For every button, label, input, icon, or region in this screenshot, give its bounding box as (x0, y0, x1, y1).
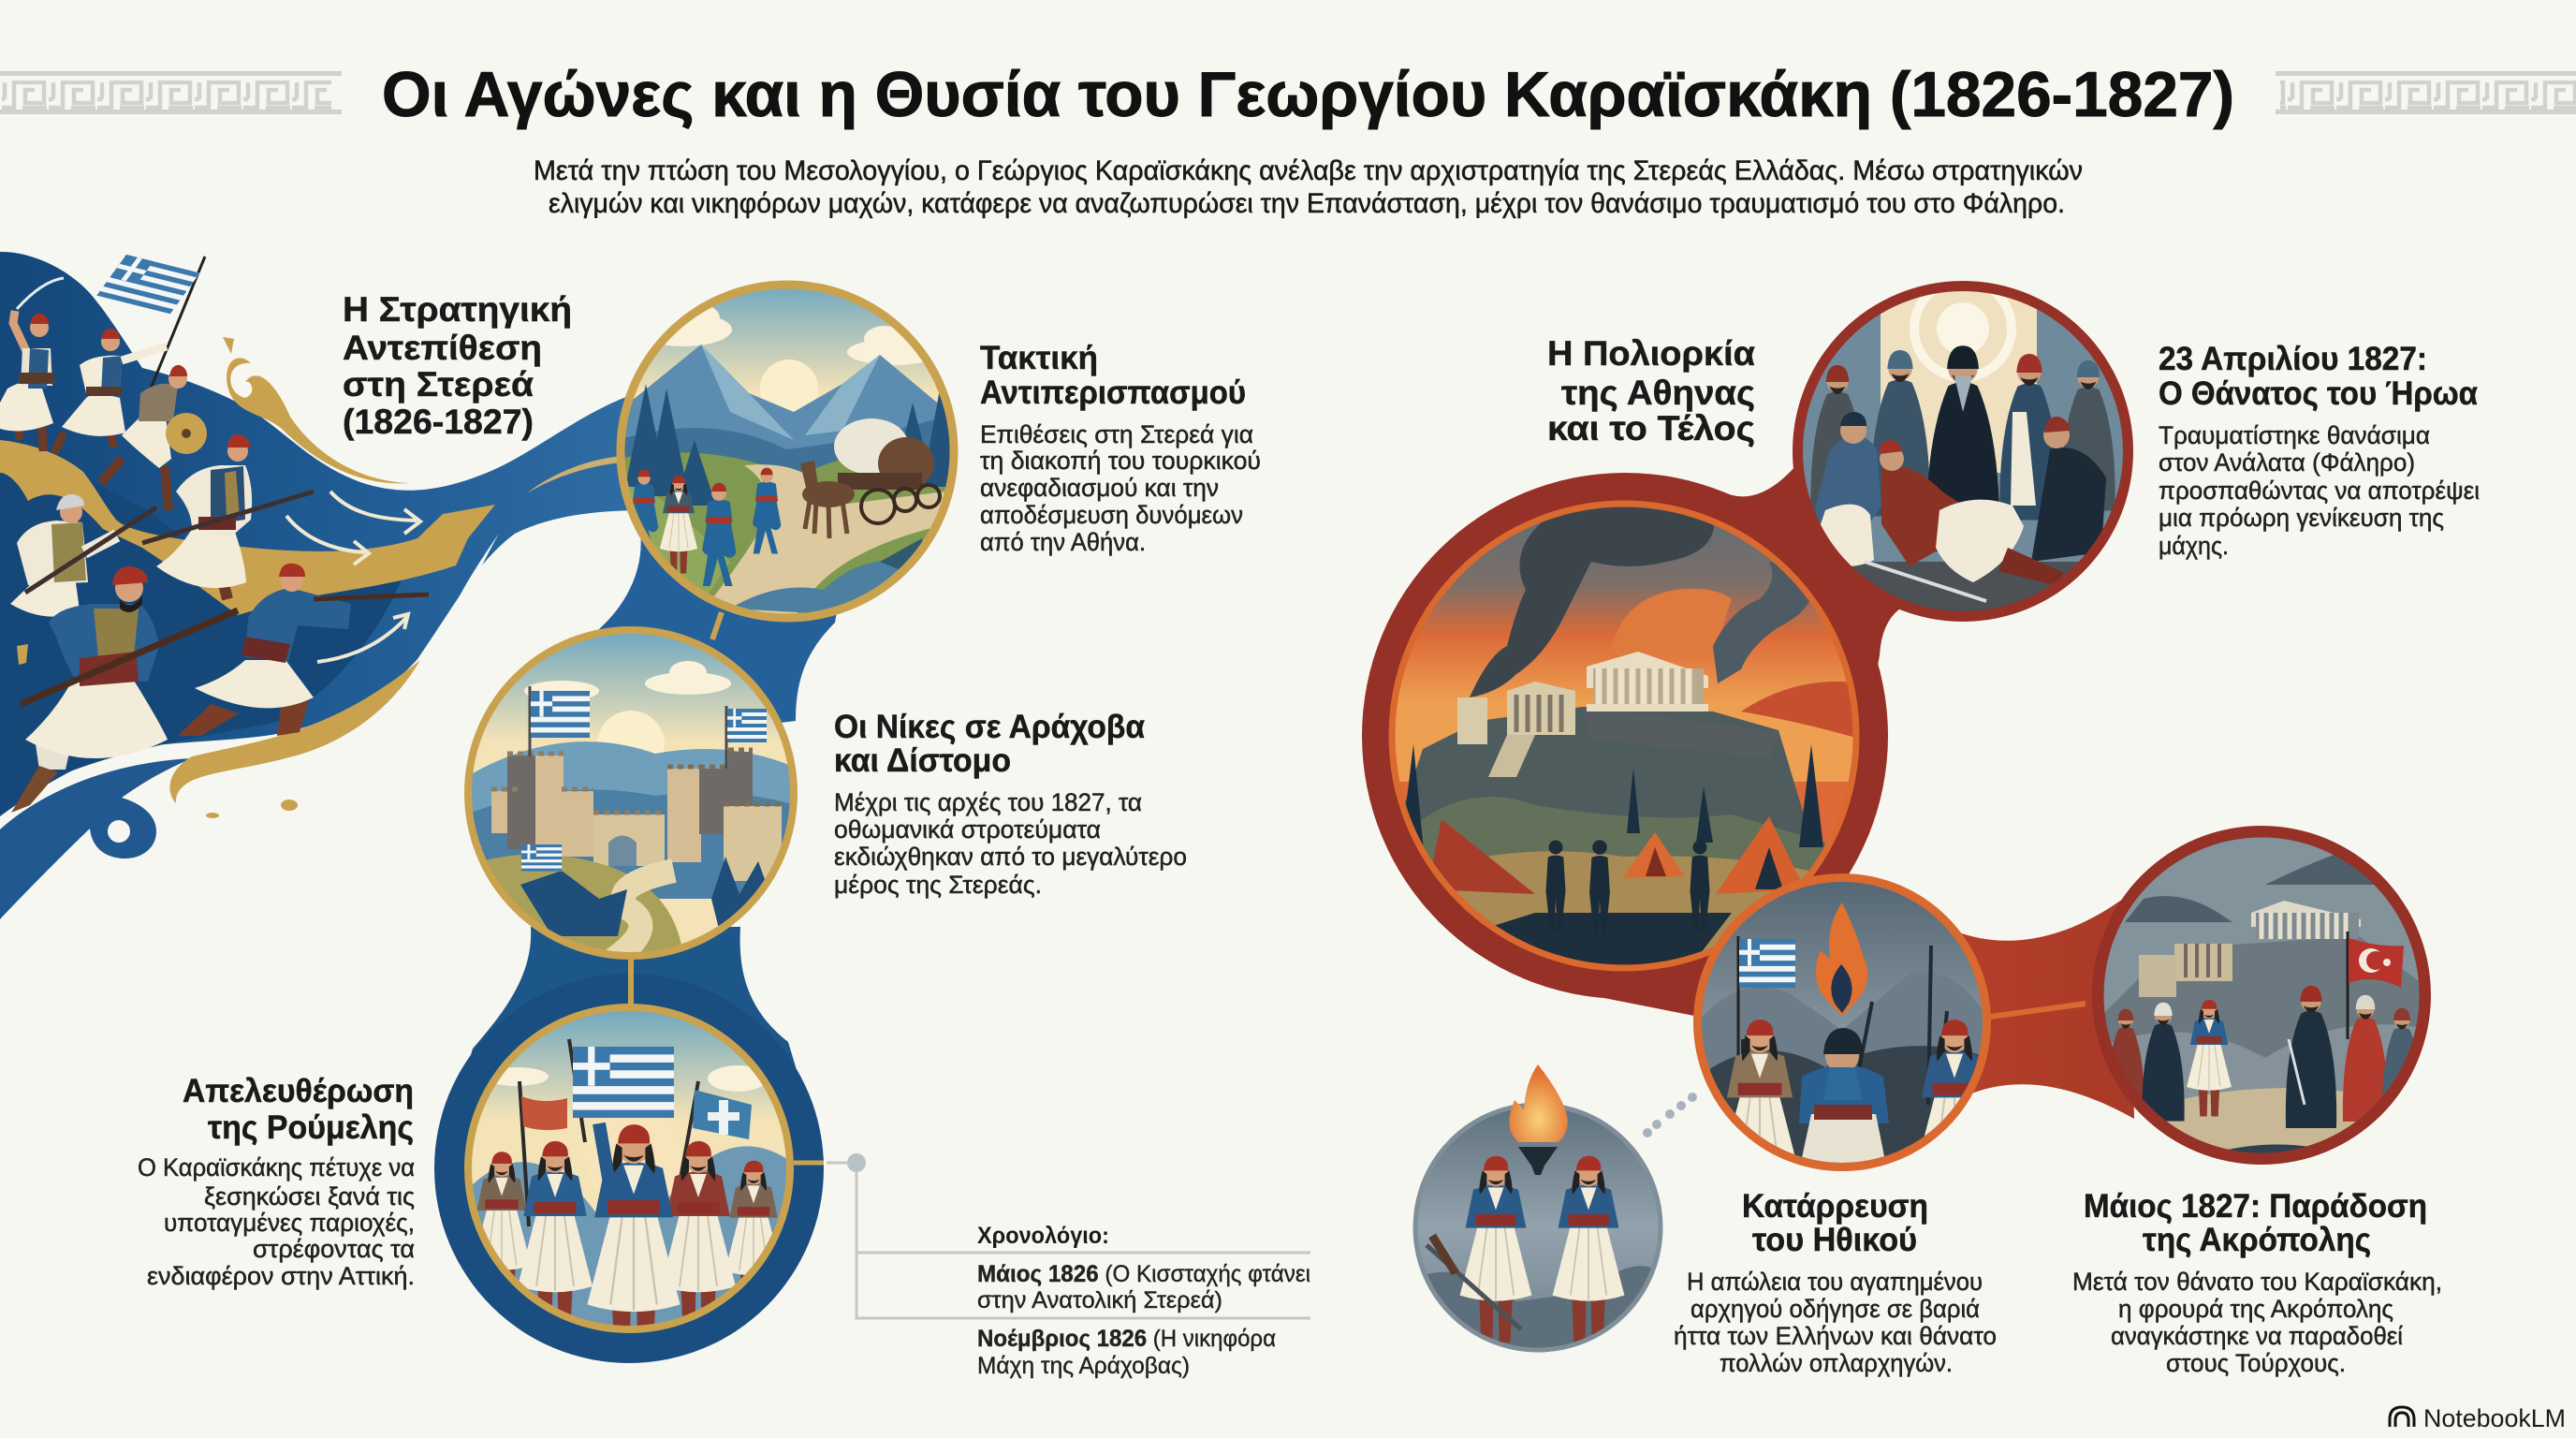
text: 23 April 1827: στον Ανάλατα (Φάληρο) (2159, 448, 2415, 477)
heading: siege of Athens: Η Πολιορκία (1547, 334, 1755, 373)
marching soldiers (753, 468, 781, 554)
text: 23 April 1827: 23 Απριλίου 1827: (2159, 341, 2427, 377)
heading: siege of Athens: και το Τέλος (1547, 409, 1755, 448)
torch flame (1509, 1064, 1568, 1142)
text: diversion tactics: ανεφαδιασμού και την (980, 474, 1219, 502)
kneeling men (1814, 438, 1881, 524)
subtitle: ελιγμών και νικηφόρων μαχών, κατάφερε να αναζωπυρώσει την Επανάσταση, μέχρι τον θανάσιμο τραυματισμό του στο Φάληρο. (549, 188, 2065, 219)
fighter 3 with shield (101, 365, 207, 510)
negotiating figures (2107, 1009, 2144, 1112)
connector: neck between circle 2 and circle 3 (435, 927, 824, 1173)
trees (625, 384, 959, 506)
text: 23 April 1827: προσπαθώντας να αποτρέψει (2159, 477, 2480, 505)
timeline text: Μάιος 1826 (Ο Κισσταχής φτάνει (977, 1261, 1310, 1287)
medallion: diversion tactics (618, 281, 959, 618)
subtitle: Μετά την πτώση του Μεσολογγίου, ο Γεώργιος Καραϊσκάκης ανέλαβε την αρχιστρατηγία της Στερεάς Ελλάδας. Μέσω στρατηγικών (534, 155, 2083, 186)
text: liberation of Roumeli: Απελευθέρωση (183, 1073, 414, 1109)
left castle (491, 754, 665, 866)
text: diversion tactics: Αντιπερισπασμού (980, 374, 1246, 411)
text: liberation of Roumeli: της Ρούμελης (208, 1109, 414, 1146)
dotted trail to torch medallion (1643, 1093, 1697, 1137)
wagon (834, 418, 940, 523)
text: collapse of morale: Κατάρρευση (1742, 1188, 1928, 1225)
timeline text: Μάχη της Αράχοβας) (977, 1353, 1190, 1379)
text: May 1827 surrender: στους Τούρχους. (2166, 1349, 2346, 1377)
medallion: torch and fallen leaders (1404, 1064, 1676, 1357)
priest beard (1954, 376, 1972, 412)
title: Οι Αγώνες και η Θυσία του Γεωργίου Καραϊσκάκη (1826-1827) (382, 59, 2234, 130)
connector: ribbon to first two circles (562, 487, 842, 749)
figures (1546, 840, 1709, 913)
text: 23 April 1827 (2159, 341, 2480, 560)
timeline text: Χρονολόγιο: (977, 1223, 1109, 1249)
medallion: collapse of morale (1693, 873, 1994, 1222)
medallion: liberation of Roumeli (468, 1007, 790, 1365)
smoke (1470, 505, 1714, 697)
gold thin arc to circle (527, 456, 622, 493)
gold flecks (17, 337, 298, 818)
tents (1427, 816, 1805, 894)
fighter 6 with musket (11, 566, 238, 813)
fighter 2 (54, 329, 167, 453)
callout: timeline connector (794, 1153, 1310, 1318)
text: victories: Οι Νίκες σε Αράχοβα (834, 709, 1145, 745)
lower swoosh (0, 758, 192, 919)
text: May 1827 surrender: της Ακρόπολης (2143, 1222, 2371, 1258)
text: 23 April 1827: Τραυματίστηκε θανάσιμα (2159, 421, 2430, 449)
text: 23 April 1827: Ο Θάνατος του Ήρωα (2159, 375, 2478, 412)
heading: strategic counterattack: Αντεπίθεση (343, 329, 542, 367)
heading: strategic counterattack: στη Στερεά (343, 365, 534, 404)
mourning soldiers (1720, 1020, 1799, 1222)
text: 23 April 1827: μάχης. (2159, 532, 2229, 560)
text: victories (834, 709, 1187, 899)
standing men (1810, 365, 1854, 511)
text: liberation of Roumeli: ενδιαφέρον στην Αττική. (147, 1262, 415, 1290)
Turkish flag (2348, 932, 2404, 1039)
text: diversion tactics: τη διακοπή του τουρκικού (980, 447, 1261, 475)
meander border right (2276, 71, 2576, 114)
heading: siege of Athens: της Αθηνας (1561, 374, 1755, 412)
text: diversion tactics: Επιθέσεις στη Στερεά για (980, 420, 1253, 448)
hill and road (487, 855, 681, 952)
text: victories: και Δίστομο (834, 742, 1011, 779)
flags (520, 1039, 698, 1226)
rocks (736, 561, 899, 612)
fighter 7 with musket (178, 564, 429, 736)
white arrows (286, 492, 420, 662)
right castle (667, 750, 782, 881)
text: diversion tactics (980, 340, 1261, 556)
spears (1743, 946, 1947, 1123)
timeline text (977, 1223, 1310, 1379)
gold connector line 2-3 (628, 955, 634, 1006)
panel: red network backing (1362, 281, 2431, 1165)
torch bowl (1518, 1147, 1558, 1175)
medallion: siege of Athens (1385, 501, 1863, 974)
flag (1737, 936, 1739, 1058)
Propylaea (1457, 682, 1575, 777)
subtitle (534, 155, 2083, 219)
text: diversion tactics: αποδέσμευση δυνόμεων (980, 501, 1243, 529)
text: victories: Μέχρι τις αρχές του 1827, τα (834, 788, 1142, 816)
flag on pole (96, 255, 205, 400)
heading: strategic counterattack (343, 290, 572, 441)
swoosh curl (108, 820, 130, 843)
glow clouds (1612, 588, 1732, 646)
text: diversion tactics: Τακτική (980, 340, 1098, 376)
acropolis rock (1405, 707, 1803, 835)
ground (1455, 851, 1808, 951)
road (714, 464, 944, 614)
text: collapse of morale: του Ηθικού (1752, 1222, 1917, 1258)
clouds (665, 307, 923, 365)
fighter 5 with musket (10, 494, 156, 617)
logo: NotebookLM: NotebookLM (2423, 1404, 2566, 1432)
propylaea (2139, 944, 2232, 997)
text: May 1827 surrender: Μετά τον θάνατο του Καραϊσκάκη, (2072, 1268, 2442, 1296)
text: liberation of Roumeli (138, 1073, 415, 1290)
dark wave (0, 449, 412, 805)
text: May 1827 surrender: Μάιος 1827: Παράδοση (2084, 1188, 2427, 1225)
sword (1865, 562, 1986, 601)
timeline text: στην Ανατολική Στερεά) (977, 1287, 1222, 1313)
text: victories: εκδιώχθηκαν από το μεγαλύτερο (834, 843, 1187, 871)
Parthenon (1587, 652, 1708, 712)
text: May 1827 surrender: αναγκάστηκε να παραδοθεί (2111, 1322, 2403, 1350)
timeline text: Νοέμβριος 1826 (Η νικηφόρα (977, 1326, 1276, 1352)
orange link between circles (1990, 1004, 2086, 1017)
flame (1816, 902, 1867, 1016)
gold lower swoosh (169, 660, 420, 803)
medallion: victories at Arachova and Distomo (466, 629, 796, 960)
text: liberation of Roumeli: Ο Καραϊσκάκης πέτυχε να (138, 1153, 415, 1181)
ribbon body (0, 252, 646, 816)
cypress trees (1406, 744, 1823, 847)
text: liberation of Roumeli: υποταγμένες παριοχές, (164, 1209, 415, 1237)
text: May 1827 surrender: η φρουρά της Ακρόπολης (2118, 1295, 2393, 1323)
medallion: death of the hero (1797, 280, 2130, 618)
text: collapse of morale: αρχηγού οδήγησε σε βαριά (1690, 1295, 1980, 1323)
text: liberation of Roumeli: ξεσηκώσει ξανά τις (204, 1182, 415, 1211)
text: diversion tactics: από την Αθήνα. (980, 528, 1146, 556)
soldiers (477, 1152, 527, 1277)
gold connector line 1-2 (712, 612, 722, 639)
meander border left (0, 71, 342, 114)
text: victories: οθωμανικά στροτεύματα (834, 815, 1101, 844)
gold top curl (227, 358, 410, 483)
text: victories: μέρος της Στερεάς. (834, 871, 1042, 899)
horses (800, 461, 855, 538)
fighter 4 with musket (142, 434, 314, 599)
connector: circle 3 backing (434, 974, 824, 1363)
heading: siege of Athens (1547, 334, 1755, 448)
white shard (434, 534, 499, 662)
text: 23 April 1827: μια πρόωρη γενίκευση της (2159, 504, 2444, 532)
medallion: surrender of the Acropolis (2097, 829, 2434, 1161)
text: liberation of Roumeli: στρέφοντας τα (253, 1235, 415, 1263)
lying hero (1881, 466, 1959, 566)
flags (530, 686, 726, 769)
parthenon (2251, 901, 2361, 939)
heading: strategic counterattack: (1826-1827) (343, 403, 534, 441)
heading: strategic counterattack: Η Στρατηγική (343, 290, 572, 329)
text: collapse of morale: ήττα των Ελλήνων και θάνατο (1674, 1322, 1997, 1350)
fighter 1 (0, 278, 64, 451)
text: collapse of morale: Η απώλεια του αγαπημένου (1687, 1268, 1983, 1296)
text: collapse of morale: πολλών οπλαρχηγών. (1720, 1349, 1953, 1377)
text: May 1827 surrender (2072, 1188, 2442, 1377)
text: collapse of morale (1674, 1188, 1997, 1377)
gold arrow (0, 440, 495, 615)
panel: blue ribbon with charging fighters (0, 252, 646, 919)
